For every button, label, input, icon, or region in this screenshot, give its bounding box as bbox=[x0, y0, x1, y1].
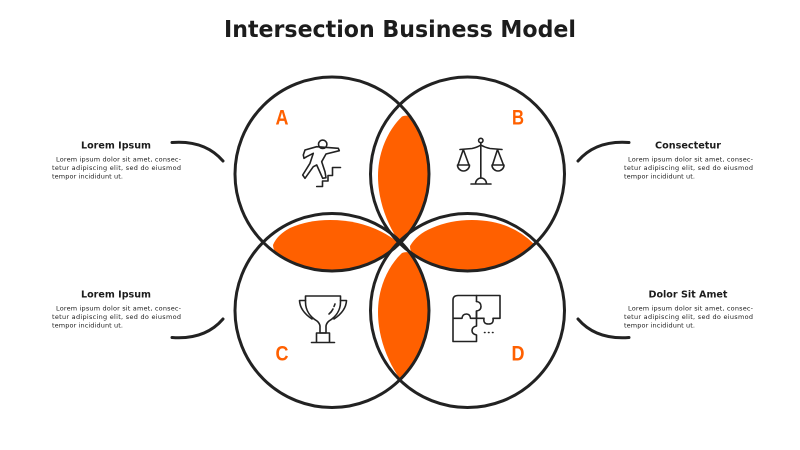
petal: A and C bbox=[273, 220, 399, 270]
body: tetur adipiscing elit, sed do eiusmod bbox=[624, 313, 753, 321]
body: tempor incididunt ut. bbox=[52, 172, 123, 180]
orange intersection petals bbox=[273, 116, 534, 379]
body: Lorem ipsum dolor sit amet, consec- bbox=[56, 156, 182, 164]
body: tempor incididunt ut. bbox=[624, 322, 695, 330]
title: Intersection Business Model bbox=[224, 16, 576, 43]
text block: top right bbox=[624, 140, 754, 180]
letter D: D bbox=[512, 342, 524, 366]
body: tetur adipiscing elit, sed do eiusmod bbox=[624, 164, 753, 172]
connector arc: top right bbox=[578, 142, 629, 161]
body: Lorem ipsum dolor sit amet, consec- bbox=[628, 304, 754, 312]
icon: trophy bbox=[300, 296, 346, 342]
letter A: A bbox=[276, 106, 288, 130]
icon: puzzle pieces bbox=[453, 296, 500, 342]
petal: C and D bbox=[378, 252, 429, 379]
text block: bottom left bbox=[52, 290, 182, 330]
petal: B and D bbox=[410, 220, 534, 271]
connector arc: bottom right bbox=[578, 319, 629, 338]
body: tempor incididunt ut. bbox=[52, 322, 123, 330]
four overlapping circles bbox=[235, 77, 564, 408]
icon: balance scales bbox=[458, 138, 504, 184]
text block: top left bbox=[52, 140, 182, 180]
letter C: C bbox=[276, 342, 288, 366]
body: Lorem ipsum dolor sit amet, consec- bbox=[56, 304, 182, 312]
body: tempor incididunt ut. bbox=[624, 172, 695, 180]
letter B: B bbox=[512, 106, 524, 130]
heading: Dolor Sit Amet bbox=[648, 290, 728, 300]
body: tetur adipiscing elit, sed do eiusmod bbox=[52, 164, 181, 172]
heading: Lorem Ipsum bbox=[81, 140, 151, 152]
petal: A and B bbox=[378, 116, 429, 243]
text block: bottom right bbox=[624, 290, 754, 330]
body: Lorem ipsum dolor sit amet, consec- bbox=[628, 156, 754, 164]
connector arc: top left bbox=[172, 142, 223, 161]
heading: Consectetur bbox=[655, 140, 721, 152]
heading: Lorem Ipsum bbox=[81, 290, 151, 300]
connector arc: bottom left bbox=[172, 319, 223, 338]
icon: runner on stairs bbox=[303, 140, 340, 186]
body: tetur adipiscing elit, sed do eiusmod bbox=[52, 313, 181, 321]
